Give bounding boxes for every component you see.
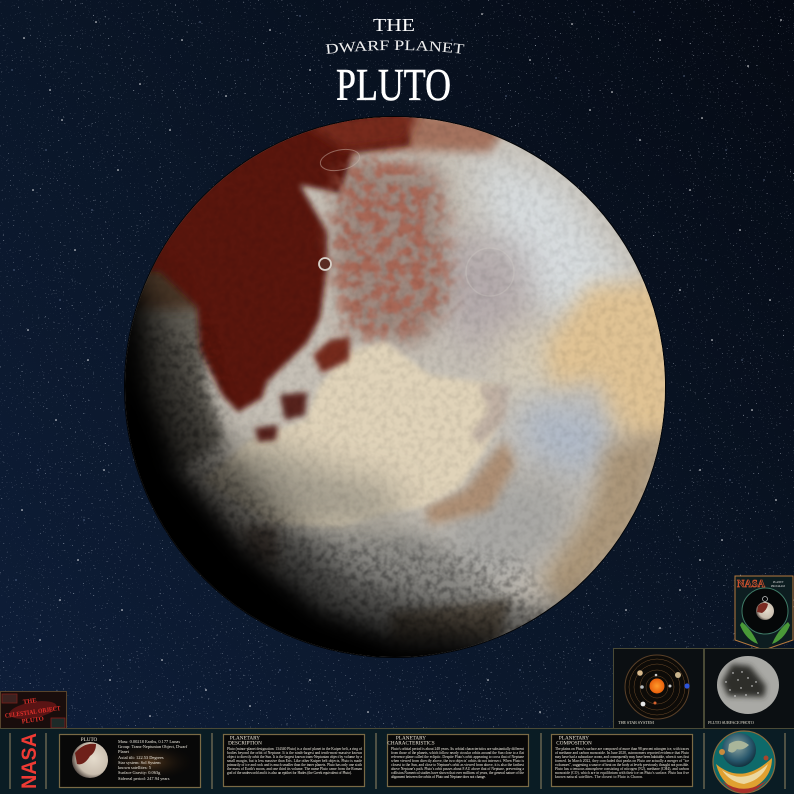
region: mottled mid north (330, 155, 450, 345)
panel: Pluto surface photo (704, 648, 794, 728)
region: left grey plain (130, 300, 225, 470)
card heading: PLANETARY (559, 736, 589, 742)
card body: god of the underworld and it is also an epithet for Hades (the Greek equivalent of Pluto). (227, 771, 352, 775)
orbit rings (629, 659, 685, 715)
badge caption (771, 581, 785, 588)
region: heart lower shading (200, 440, 400, 530)
region: rough brown patch (240, 525, 278, 567)
card body: may have had a subsurface ocean, and consequently may have been habitable, when it was first (555, 755, 689, 760)
crater: eastern ring (466, 248, 514, 296)
banner text: THE (23, 697, 37, 706)
region: red dark plain (150, 117, 413, 416)
card body: bodies beyond the orbit of Neptune. It is the ninth-largest and tenth-most-massive known (227, 751, 362, 755)
mini planet red area (75, 744, 96, 764)
card body: small margin, but is less massive than Eris. Like other Kuiper belt objects, Pluto is made (227, 759, 362, 764)
emblem Earth (722, 733, 756, 767)
panel caption: THE STAR SYSTEM (618, 720, 654, 725)
texture: rough southern terrain (151, 324, 548, 640)
region: brown ridge by heart (425, 440, 515, 525)
card body: primarily of ice and rock and is much smaller than the inner planets. Pluto has only one sixth (227, 763, 362, 767)
facts list: Axial tilt: 122.53 Degrees (118, 755, 164, 760)
badge caption: PROGRAM (771, 585, 785, 588)
card body: monoxide (CO), which are in equilibrium with their ice on Pluto's surface. Pluto has five (555, 771, 689, 776)
mini planet (72, 742, 108, 778)
pillars (9, 733, 786, 789)
emblem cream arc (722, 764, 768, 784)
badge laurel right (772, 622, 790, 644)
orbit disc (625, 655, 689, 719)
emblem red rim (722, 780, 767, 793)
facts list (118, 739, 188, 781)
badge dark medallion (742, 588, 788, 634)
footer band (0, 728, 794, 794)
surface photo disc (717, 656, 779, 714)
card body: collision.Numerical studies have shown that over millions of years, the general nature of the (391, 771, 524, 776)
card heading (556, 736, 592, 746)
card heading: CHARACTERISTICS (387, 740, 435, 746)
card body: volcanoes", suggesting a source of heat on the body at levels previously thought not possible. (555, 763, 689, 768)
card body: The plains on Pluto's surface are composed of more than 98 percent nitrogen ice, with traces (555, 747, 690, 752)
facts list: Group: Trans-Neptunian Object, Dwarf (118, 744, 188, 750)
crater ring (319, 258, 331, 270)
texture: fine terrain grain (208, 118, 665, 614)
emblem yellow band (716, 758, 772, 792)
region: white-blue northeast (470, 150, 640, 320)
region: red flecks (320, 151, 462, 344)
emblem Earth clouds (728, 741, 749, 753)
badge planet red area (757, 603, 768, 613)
card body: known natural satellites. The closest to Pluto is Charon. (555, 775, 643, 779)
planet: Pluto (124, 116, 666, 658)
emblem: Earth roundel (713, 731, 775, 793)
title line: Dwarf Planet: DWARF PLANET (326, 40, 464, 54)
badge Pluto symbol (762, 596, 768, 602)
card body: from those of the planets, which follow nearly circular orbits around the Sun close to a flat (391, 751, 524, 756)
card body (391, 747, 525, 779)
banner text: CELESTIAL OBJECT (5, 705, 62, 720)
badge laurel left (740, 622, 758, 644)
planet dark rim (124, 116, 666, 658)
banner text (5, 697, 62, 726)
card body: Pluto has a tenuous atmosphere consisting of nitrogen (N2), methane (CH4), and carbon (555, 767, 689, 772)
region: mauve streaks on heart (470, 385, 510, 445)
card body: object to directly orbit the Sun. It is the largest known trans-Neptunian object by volume by a (227, 755, 362, 759)
facts list: Mass: 0.00218 Earths, 0.177 Lunas (118, 739, 180, 745)
planets (637, 670, 690, 706)
card glow (102, 742, 198, 782)
badge planet (756, 602, 774, 620)
facts list: Star system: Sol System (118, 760, 161, 765)
card heading: COMPOSITION (556, 740, 592, 746)
facts list: Sidereal period: 247.94 years (118, 776, 170, 781)
card body: Pluto's orbital period is about 248 years. Its orbital characteristics are substantially different (391, 747, 524, 751)
card body: reference plane called the ecliptic. Despite Pluto's orbit appearing to cross that of Neptune (391, 755, 524, 759)
region: blue patch (515, 395, 628, 480)
NASA worm logo: NASA (18, 733, 41, 789)
facts list: known satellites: 5 (118, 765, 152, 770)
card: Pluto facts (60, 734, 200, 788)
card: planetary description (224, 734, 364, 786)
region: dark red southern lobes (255, 392, 307, 442)
card heading (228, 736, 262, 746)
region: upper limb brown (136, 242, 200, 315)
region: brown band south (390, 600, 510, 645)
card body: the mass of Earth's moon, and one third its volume. The name Pluto came from the Roman (227, 767, 362, 772)
banner red swoosh (8, 698, 58, 722)
panel: the star system (614, 648, 704, 728)
region: eastern orange (545, 280, 680, 445)
card heading (387, 736, 435, 746)
card body: above Neptune's path. Pluto's orbit passes about 8 AU above that of Neptune, preventing a (391, 767, 524, 772)
banner text: PLUTO (21, 715, 44, 726)
banner thumbnail left (2, 694, 17, 703)
region: pale east-centre (496, 324, 546, 396)
card body (555, 747, 690, 779)
title line: Pluto: PLUTO (336, 60, 451, 110)
card heading: PLUTO (81, 737, 98, 743)
card body: of methane and carbon monoxide. In June 2020, astronomers reported evidence that Pluto (555, 751, 689, 756)
sun (650, 678, 664, 694)
card body: Pluto (minor-planet designation: 134340 Pluto) is a dwarf planet in the Kuiper belt, a ring of (227, 747, 363, 752)
card: planetary characteristics (387, 734, 528, 786)
facts list: Planet (118, 749, 130, 754)
surface rocks (722, 664, 766, 697)
card body: when viewed from directly above, the two objects' orbits do not intersect. When Pluto is (391, 759, 525, 764)
banner: the celestial object Pluto (0, 692, 66, 728)
region: grey south-east (430, 470, 575, 590)
region: red bright top (300, 110, 420, 150)
region: broad terminator shading (125, 263, 581, 657)
badge caption: PLANET (773, 581, 784, 584)
card heading: DESCRIPTION (228, 740, 262, 746)
banner thumbnail right (51, 718, 65, 728)
title (326, 15, 464, 110)
panel caption: PLUTO SURFACE PHOTO (708, 720, 755, 725)
region: red blob at heart edge (313, 337, 350, 373)
badge: planet program (735, 576, 793, 650)
region: south terrain (270, 530, 540, 670)
region: black terminator crescent (125, 288, 494, 657)
card heading: PLANETARY (396, 736, 426, 742)
card heading: PLANETARY (230, 736, 260, 742)
card body (227, 747, 363, 775)
crater: northern ring (320, 148, 360, 172)
region: mauve grey mid (440, 230, 530, 350)
title line: THE: THE (373, 15, 415, 35)
surface bright rocks (726, 672, 758, 696)
region: tan south-east limb (540, 430, 670, 610)
region: cream heart (203, 342, 503, 527)
facts list: Surface Gravity: 0.063g (118, 770, 161, 775)
badge NASA wordmark: NASA (737, 578, 765, 590)
card body: alignment between the orbits of Pluto and Neptune does not change. (391, 775, 486, 779)
region: north brown band (371, 117, 504, 158)
emblem small planets (719, 749, 768, 760)
card: planetary composition (552, 734, 692, 786)
card body: formed. In March 2022, they concluded that peaks on Pluto are actually a merger of "ice (555, 759, 689, 764)
card body: closest to the Sun, and close to Neptune's orbit as viewed from above, it is also the farthest (391, 763, 524, 768)
